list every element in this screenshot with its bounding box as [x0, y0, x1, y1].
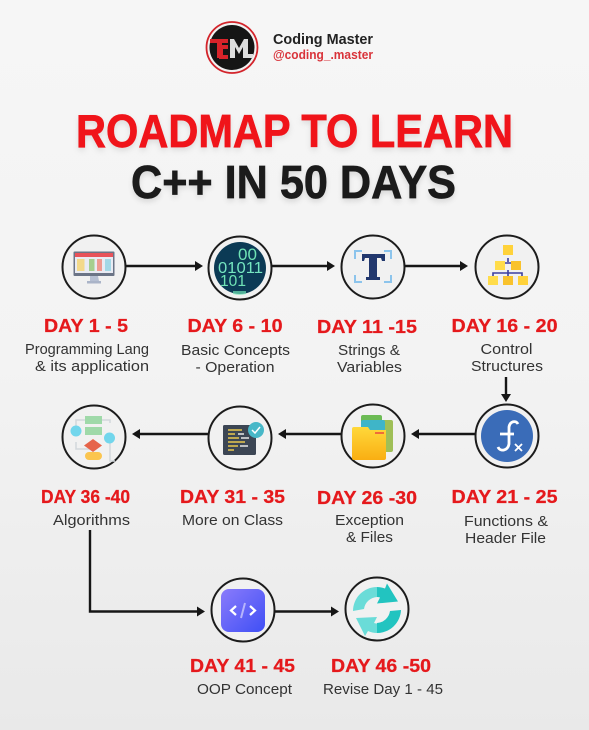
description: Programming Lang [25, 342, 149, 358]
arrow: day 1-5 to 6-10 [126, 261, 203, 271]
description [181, 343, 290, 376]
step: day 6-10 [181, 236, 290, 376]
date heading: DAY 36 -40 [41, 486, 130, 507]
arrow: day 11-15 to 16-20 [405, 261, 468, 271]
arrow: day 6-10 to 11-15 [272, 261, 335, 271]
description: - Operation [196, 360, 274, 376]
step: day 11-15 [317, 236, 417, 376]
description [25, 342, 149, 375]
description [471, 342, 543, 375]
icon: binary code [208, 236, 272, 300]
icon: code tag [212, 578, 274, 642]
arrow: day 26-30 to 31-35 [278, 429, 342, 439]
description: Control [480, 342, 532, 358]
icon: Coding Master logo [206, 22, 258, 73]
description: Structures [471, 359, 543, 375]
title shadow: ROADMAP TO LEARN [76, 108, 513, 160]
description: Algorithms [53, 513, 130, 529]
description: Functions & [464, 514, 548, 530]
step: day 26-30 [317, 404, 417, 546]
description: More on Class [182, 513, 283, 529]
date heading: DAY 1 - 5 [44, 315, 128, 336]
brand header [206, 22, 373, 73]
step: day 46-50 [323, 578, 443, 698]
icon: binary code: 01011 [218, 260, 263, 277]
description: Header File [465, 531, 546, 547]
icon: refresh arrows [346, 578, 408, 640]
icon: file folders [342, 404, 404, 468]
title [76, 105, 513, 211]
description: Variables [337, 360, 402, 376]
brand handle: @coding_.master [273, 48, 373, 62]
step: day 36-40 [41, 406, 130, 529]
title shadow [76, 108, 513, 211]
title shadow: C++ IN 50 DAYS [131, 159, 456, 211]
arrow: day 36-40 to 41-45 [90, 530, 205, 616]
icon: desktop monitor [62, 236, 126, 298]
date heading: DAY 16 - 20 [452, 315, 558, 336]
icon: binary code: 00 [238, 245, 257, 264]
icon: function symbol [476, 404, 538, 468]
icon: flowchart [62, 406, 126, 468]
step: day 16-20 [452, 236, 558, 375]
step: day 21-25 [452, 404, 558, 547]
arrow: day 41-45 to 46-50 [274, 606, 339, 616]
description [335, 513, 404, 546]
icon: code checklist [208, 406, 272, 470]
arrow: day 21-25 to 26-30 [411, 429, 476, 439]
date heading: DAY 41 - 45 [190, 655, 295, 676]
date heading: DAY 6 - 10 [188, 315, 282, 336]
step: day 41-45 [190, 578, 295, 698]
date heading: DAY 11 -15 [317, 316, 417, 337]
title line 2: C++ IN 50 DAYS [131, 156, 456, 208]
description [337, 343, 402, 376]
date heading: DAY 26 -30 [317, 487, 417, 508]
description: & its application [35, 359, 149, 375]
brand name: Coding Master [273, 32, 373, 48]
date heading: DAY 46 -50 [331, 655, 431, 676]
description: Strings & [338, 343, 400, 359]
description [464, 514, 548, 547]
title line 1: ROADMAP TO LEARN [76, 105, 513, 157]
description: & Files [346, 530, 393, 546]
step: day 1-5 [25, 236, 149, 375]
description: Revise Day 1 - 45 [323, 682, 443, 698]
icon: text T [342, 236, 404, 298]
arrow: day 31-35 to 36-40 [132, 429, 209, 439]
description: Basic Concepts [181, 343, 290, 359]
step: day 31-35 [180, 406, 285, 529]
icon: hierarchy blocks [476, 236, 538, 298]
icon: binary code: 101 [220, 273, 246, 290]
date heading: DAY 21 - 25 [452, 486, 558, 507]
date heading: DAY 31 - 35 [180, 486, 285, 507]
description: OOP Concept [197, 682, 292, 698]
arrow: day 16-20 to 21-25 [501, 377, 511, 402]
description: Exception [335, 513, 404, 529]
